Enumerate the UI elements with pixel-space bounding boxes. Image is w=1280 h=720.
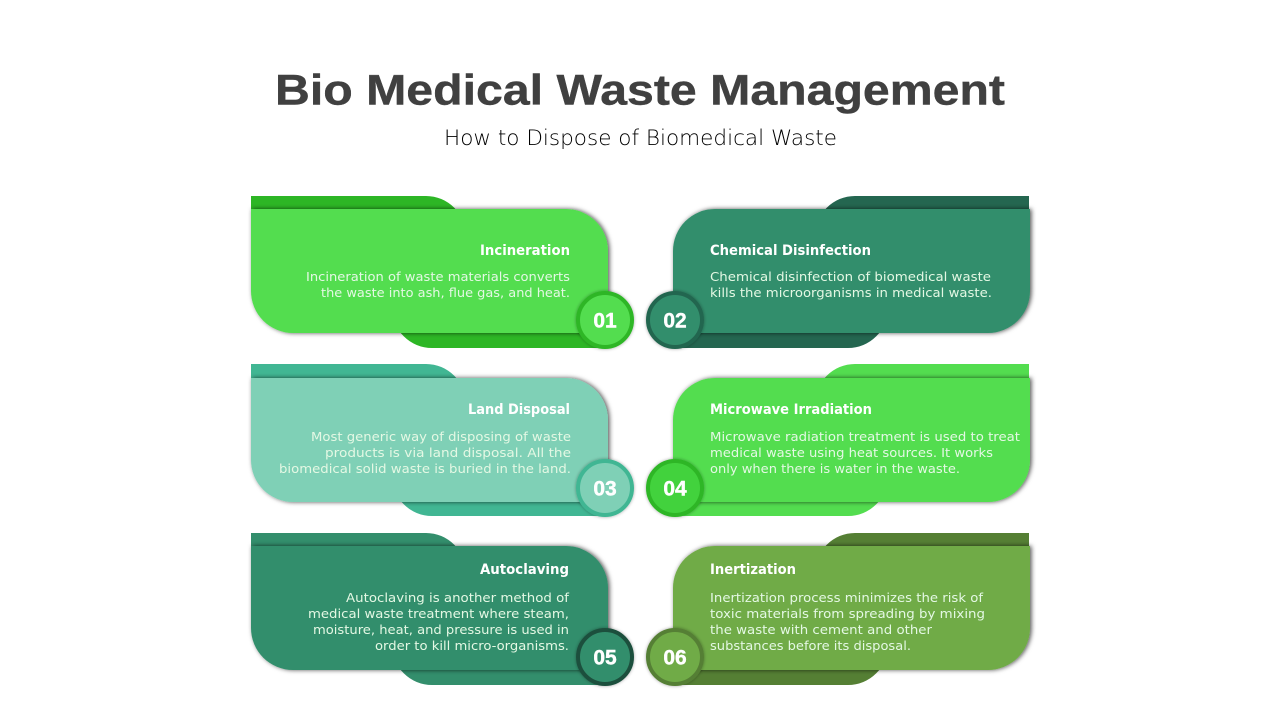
description: only when there is water in the waste. [710,461,960,476]
back tabs [680,533,1029,685]
number badge [578,630,632,684]
number badge [578,293,632,347]
heading: Incineration [480,243,570,259]
description: medical waste treatment where steam, [308,606,569,621]
panel: 05 Autoclaving [251,533,632,685]
description: the waste into ash, flue gas, and heat. [321,285,570,300]
number badge [648,461,702,515]
description: order to kill micro-organisms. [375,638,569,653]
heading: Inertization [710,562,796,578]
number badge: 03 [593,478,617,500]
description [710,590,985,653]
description: biomedical solid waste is buried in the land. [279,461,571,476]
title: Bio Medical Waste Management [275,66,1005,114]
back tabs [680,196,1029,348]
card [673,209,1030,333]
panel: 04 Microwave Irradiation [648,364,1030,516]
description: Microwave radiation treatment is used to treat [710,429,1020,444]
number badge: 01 [593,310,617,332]
panel: 03 Land Disposal [251,364,632,516]
number badge [578,461,632,515]
panel: 01 Incineration [251,196,632,348]
description [308,590,570,653]
panel: 06 Inertization [648,533,1030,685]
back tabs [251,196,600,348]
number badge: 02 [663,310,687,332]
number badge: 05 [593,646,617,670]
number badge: 04 [663,478,687,500]
description: products is via land disposal. All the [325,445,571,460]
description: the waste with cement and other [710,622,933,637]
heading: Land Disposal [468,402,570,418]
description: Incineration of waste materials converts [306,269,570,284]
description [710,269,992,300]
card [251,378,608,502]
description: moisture, heat, and pressure is used in [313,622,569,637]
description: Chemical disinfection of biomedical waste [710,269,991,284]
description: toxic materials from spreading by mixing [710,606,985,621]
description: kills the microorganisms in medical waste. [710,285,992,300]
heading: Chemical Disinfection [710,243,871,259]
description [710,429,1020,476]
description: Autoclaving is another method of [346,590,570,605]
heading: Microwave Irradiation [710,402,872,418]
card [251,546,608,670]
description [279,429,571,476]
card [251,209,608,333]
back tabs [251,364,600,516]
description: substances before its disposal. [710,638,911,653]
heading: Autoclaving [480,562,569,578]
back tabs [251,533,600,685]
back tabs [680,364,1029,516]
number badge [648,293,702,347]
card [673,546,1030,670]
number badge: 06 [663,646,687,670]
description: medical waste using heat sources. It works [710,445,993,460]
card [673,378,1030,502]
description: Most generic way of disposing of waste [311,429,571,444]
description: Inertization process minimizes the risk of [710,590,984,605]
number badge [648,630,702,684]
panel: 02 Chemical Disinfection [648,196,1030,348]
description [306,269,570,300]
subtitle: How to Dispose of Biomedical Waste [444,126,837,150]
